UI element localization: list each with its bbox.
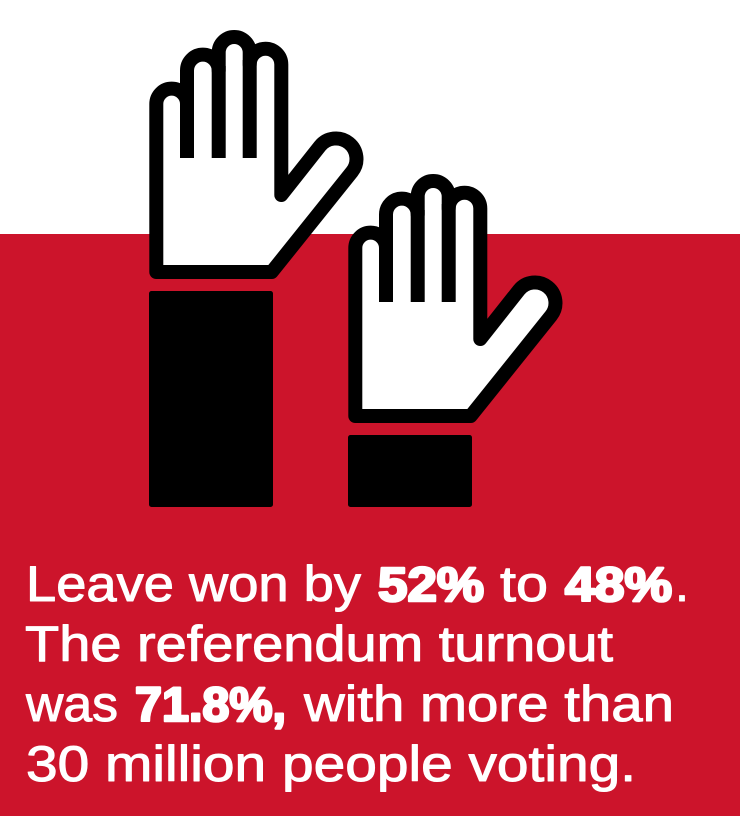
line 1: to: [500, 556, 548, 612]
line 1: [26, 556, 689, 612]
small hand sleeve: [348, 435, 472, 507]
red background panel: [0, 234, 740, 816]
small hand outline: [355, 181, 555, 416]
white top background: [0, 0, 740, 234]
line 1: 52%: [378, 559, 484, 612]
small hand finger separators: [386, 204, 449, 302]
line 2: The referendum turnout: [25, 616, 613, 672]
large hand outline: [156, 37, 356, 272]
text block: referendum result: [25, 556, 689, 792]
line 4: 30 million people voting.: [26, 736, 636, 792]
line 3: 71.8%,: [135, 679, 286, 732]
icon: large raised hand: [149, 37, 356, 507]
line 1: Leave won by: [26, 556, 361, 612]
line 1: 48%: [565, 559, 672, 612]
line 3: [25, 676, 674, 732]
line 3: with more than: [303, 676, 674, 732]
large hand sleeve: [149, 291, 273, 507]
line 3: was: [25, 676, 118, 732]
line 1: .: [675, 556, 689, 612]
large hand finger separators: [187, 60, 250, 158]
icon: small raised hand: [348, 181, 555, 507]
